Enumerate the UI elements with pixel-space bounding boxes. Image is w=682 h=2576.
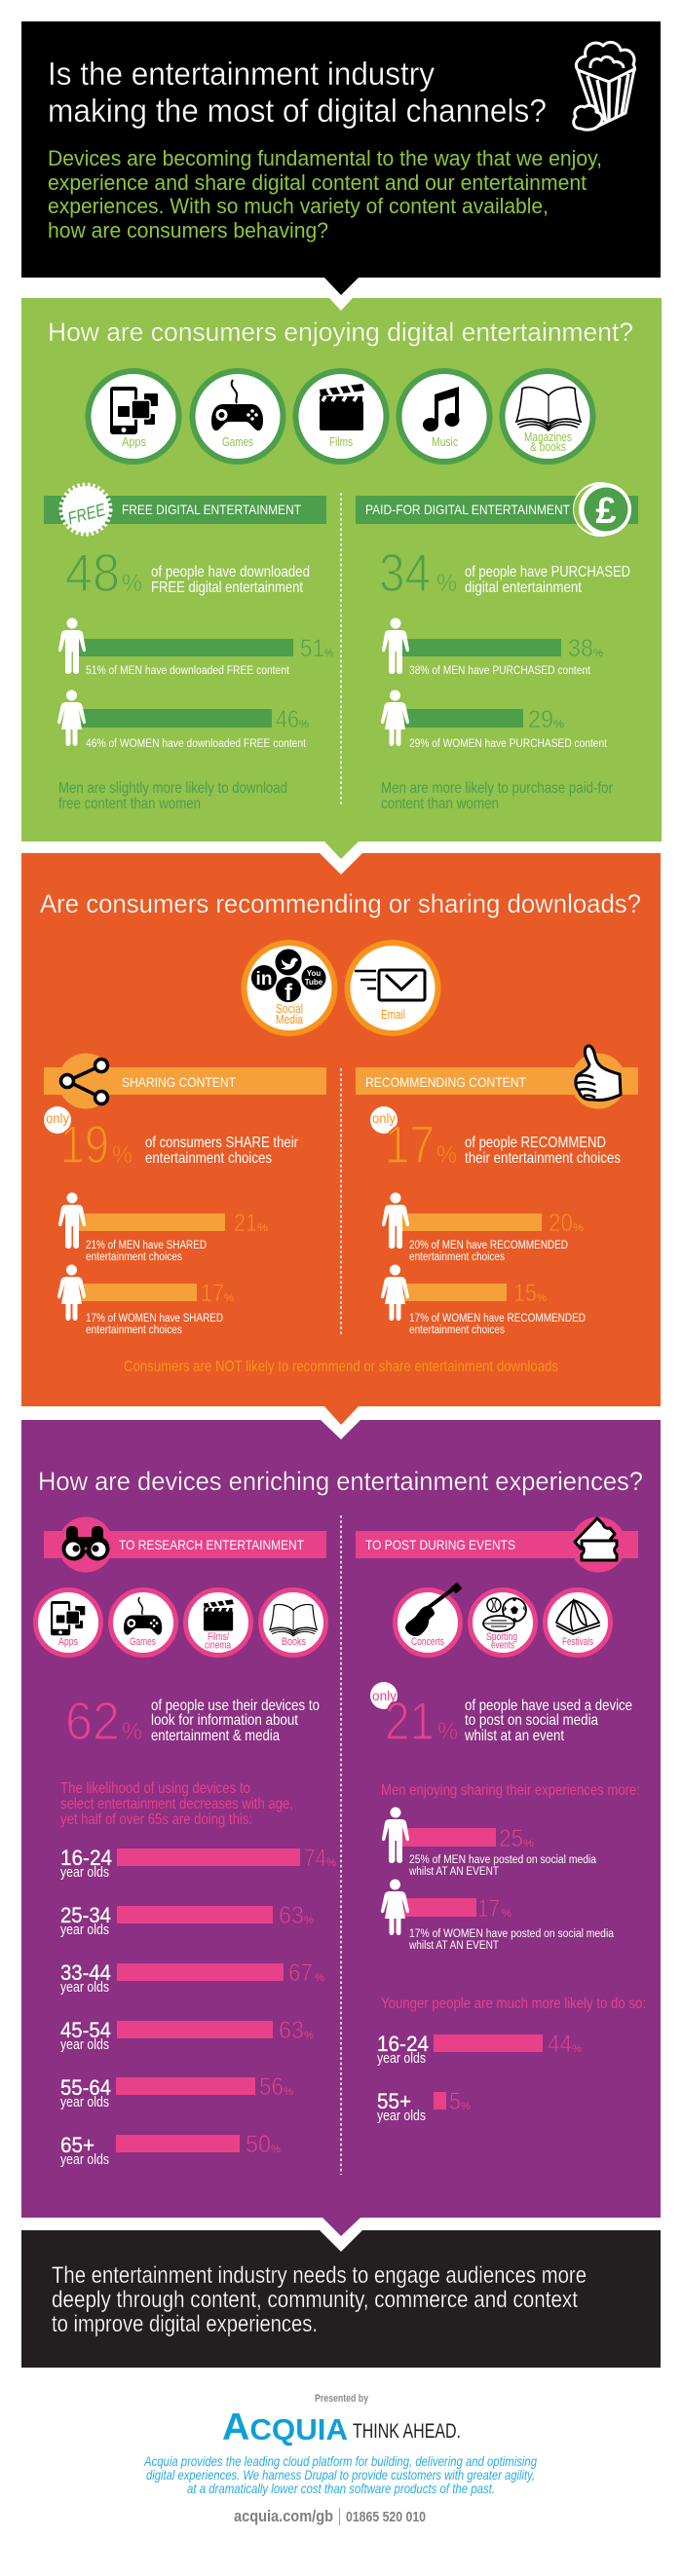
stat: only 19 percent share: 19: [60, 1114, 109, 1175]
bar: men recommended 20: [382, 1192, 584, 1263]
icon: small films: Films/: [208, 1631, 230, 1643]
logo: Acquia: ACQUIA: [222, 2407, 348, 2448]
icon: pound coin: £: [595, 491, 617, 532]
heading: green panel: How are consumers enjoying digital entertainment?: [48, 317, 633, 347]
icon: sporting events balls: [470, 1589, 536, 1656]
bar: men posted 25: 25: [499, 1825, 523, 1852]
bar: 16-24: [60, 1845, 336, 1881]
icon: games: [193, 371, 283, 462]
bar: women posted 17: [381, 1880, 615, 1952]
panel: green, consumers enjoying digital entertainment: [21, 278, 662, 841]
bar: posting 55+: [377, 2088, 471, 2124]
icon: social media: Social: [276, 1001, 303, 1016]
company description: digital experiences. We harness Drupal to provide customers with greater agility,: [146, 2467, 535, 2483]
banner: sharing content: SHARING CONTENT: [122, 1074, 236, 1090]
bar: 25-34: year olds: [60, 1922, 109, 1938]
bar: women paid 29: %: [553, 719, 564, 730]
stat: only 19 percent share: [44, 1106, 299, 1175]
text: presented by: Presented by: [315, 2393, 369, 2405]
title: [48, 56, 547, 129]
intro paragraph: experience and share digital content and our entertainment: [48, 170, 587, 195]
bar: 65+: %: [271, 2144, 281, 2155]
bar: 16-24: year olds: [60, 1864, 109, 1881]
banner: to post during events: [356, 1517, 638, 1572]
icon: social media: Tube: [305, 978, 323, 987]
arrow: green pointer: [324, 841, 359, 859]
stat: only 21 percent post: [370, 1682, 632, 1751]
bar: women recommended 15: 15: [513, 1280, 537, 1307]
stat: only 21 percent post: to post on social media: [465, 1712, 598, 1729]
panel: header: [21, 21, 661, 278]
company description: [143, 2453, 537, 2496]
bar: 33-44: %: [315, 1972, 324, 1984]
bar: posting 16-24: [377, 2031, 582, 2067]
bar: 33-44: 67: [288, 1960, 313, 1987]
stat: 34 percent purchased: digital entertainment: [465, 579, 582, 596]
conclusion: paid content: content than women: [381, 796, 499, 812]
bar: men paid 38: [382, 617, 603, 677]
banner: to research entertainment: TO RESEARCH ENTERTAINMENT: [119, 1537, 304, 1552]
stat: only 17 percent recommend: %: [436, 1141, 457, 1169]
stat: 48 percent free: [65, 542, 310, 603]
bar: women free 46: [57, 690, 309, 750]
icon: sporting events balls: events: [491, 1640, 514, 1652]
bar: 33-44: year olds: [60, 1979, 109, 1996]
bar: men free 51: 51: [300, 635, 324, 662]
conclusion: free content: [58, 780, 287, 812]
conclusion: free content: free content than women: [58, 796, 201, 812]
banner: paid-for digital entertainment: [356, 496, 638, 524]
bar: women free 46: 46% of WOMEN have downloaded FREE content: [86, 738, 307, 750]
stat: 48 percent free: FREE digital entertainment: [151, 579, 303, 596]
banner: paid-for digital entertainment: PAID-FOR DIGITAL ENTERTAINMENT: [365, 502, 570, 517]
icon: email: Email: [381, 1007, 405, 1022]
stat: only 19 percent share: %: [112, 1141, 133, 1169]
bar: men free 51: [58, 617, 333, 677]
icon: films: [296, 371, 386, 462]
icon: concerts guitar: [396, 1584, 461, 1656]
stat: 34 percent purchased: %: [436, 570, 457, 597]
icon: magazines and books: Magazines: [524, 429, 572, 444]
title: making the most of digital channels?: [48, 93, 547, 129]
stat: only 17 percent recommend: their entertainment choices: [465, 1150, 621, 1167]
bar: men recommended 20: 20% of MEN have RECOMMENDED: [409, 1240, 568, 1251]
closing text: to improve digital experiences.: [52, 2311, 318, 2337]
bar: men posted 25: whilst AT AN EVENT: [408, 1866, 499, 1878]
stat: 62 percent research: [65, 1691, 320, 1751]
icon: small apps: Apps: [58, 1636, 78, 1648]
bar: women shared 17: 17% of WOMEN have SHARED: [86, 1313, 223, 1325]
icon: share nodes: [60, 1060, 107, 1104]
chart: age bars left: [60, 1845, 336, 2168]
icon: magazines and books: [503, 371, 592, 462]
bar: 16-24: 16-24: [60, 1846, 112, 1870]
banner: recommending content: RECOMMENDING CONTENT: [365, 1074, 526, 1090]
icon: small apps: [35, 1589, 101, 1656]
icon: social media: f: [284, 980, 293, 1006]
bar: 25-34: %: [304, 1915, 314, 1926]
icon: free badge: [60, 485, 111, 534]
bar: men posted 25: %: [523, 1838, 534, 1849]
icon: social media: in: [256, 969, 272, 989]
stat: 34 percent purchased: [379, 542, 630, 603]
stat: 62 percent research: entertainment & media: [151, 1728, 280, 1744]
stat: only 17 percent recommend: 17: [385, 1114, 435, 1175]
bar: 65+: year olds: [60, 2151, 109, 2168]
stat: 34 percent purchased: of people have PURCHASED: [465, 564, 630, 580]
panel: orange, recommending or sharing: [21, 841, 661, 1406]
bar: women free 46: %: [299, 719, 309, 730]
closing text: deeply through content, community, commerce and context: [52, 2287, 578, 2313]
stat: only 21 percent post: only: [372, 1688, 397, 1703]
icon: magazines and books: & books: [530, 439, 566, 454]
arrow: header pointer: [324, 278, 359, 295]
bar: posting 55+: 55+: [377, 2089, 411, 2113]
tagline: THINK AHEAD.: [353, 2420, 461, 2443]
banner: sharing content: [44, 1054, 326, 1108]
contact details: 01865 520 010: [346, 2509, 426, 2525]
bar: 25-34: [60, 1902, 314, 1938]
arrow: purple pointer: [322, 2218, 360, 2236]
icon: small books: Books: [282, 1636, 306, 1648]
bar: posting 55+: year olds: [377, 2108, 426, 2124]
text: likelihood by age: select entertainment decreases with age,: [60, 1796, 293, 1812]
bar: women recommended 15: 17% of WOMEN have RECOMMENDED: [409, 1313, 586, 1325]
bar: 45-54: [60, 2017, 314, 2053]
icon: games: Games: [222, 434, 253, 449]
stat: only 19 percent share: entertainment choices: [145, 1150, 272, 1167]
bar: men paid 38: %: [593, 648, 603, 659]
banner: recommending content: [356, 1054, 638, 1108]
bar: men paid 38: 38% of MEN have PURCHASED content: [409, 665, 591, 677]
icon: small games: [111, 1589, 175, 1656]
icon: sporting events balls: Sporting: [486, 1631, 517, 1643]
conclusion: paid content: Men are more likely to purchase paid-for: [381, 780, 614, 797]
bar: 55-64: %: [284, 2086, 293, 2098]
stat: only 21 percent post: 21: [385, 1691, 435, 1751]
icon: social media: You: [307, 969, 321, 978]
bar: women posted 17: %: [502, 1908, 512, 1920]
bar: men posted 25: [382, 1808, 597, 1878]
bar: 33-44: [60, 1960, 324, 1996]
stat: only 19 percent share: of consumers SHARE their: [145, 1135, 299, 1151]
icon: music: Music: [432, 434, 458, 449]
stat: only 17 percent recommend: only: [372, 1110, 396, 1126]
stat: 48 percent free: %: [122, 570, 142, 597]
icon: pound coin: [573, 482, 631, 537]
stat: 62 percent research: look for information about: [151, 1712, 298, 1729]
bar: 65+: 65+: [60, 2133, 95, 2157]
heading: orange panel: Are consumers recommending or sharing downloads?: [40, 889, 641, 918]
bar: men shared 21: entertainment choices: [86, 1251, 182, 1263]
bar: 16-24: 74: [304, 1845, 326, 1872]
bar: posting 55+: 5: [449, 2088, 461, 2115]
icon: tickets: [575, 1518, 617, 1560]
intro paragraph: Devices are becoming fundamental to the way that we enjoy,: [48, 146, 602, 170]
text: likelihood by age: The likelihood of using devices to: [60, 1780, 250, 1797]
contact details: acquia.com/gb: [234, 2507, 333, 2525]
icon: free badge: FREE: [65, 500, 108, 529]
stat: 62 percent research: %: [122, 1718, 142, 1745]
bar: women shared 17: 17: [201, 1280, 224, 1307]
bar: men free 51: %: [324, 648, 333, 659]
bar: women free 46: 46: [276, 706, 299, 733]
bar: 16-24: %: [326, 1857, 336, 1869]
title: Is the entertainment industry: [48, 56, 435, 92]
bar: men free 51: 51% of MEN have downloaded FREE content: [86, 665, 290, 677]
bar: 45-54: %: [304, 2030, 314, 2041]
intro paragraph: experiences. With so much variety of content available,: [48, 194, 549, 218]
icon: binoculars: [62, 1526, 109, 1560]
bar: 55-64: 55-64: [60, 2075, 111, 2100]
icon: popcorn: [574, 42, 635, 130]
bar: women shared 17: %: [224, 1292, 234, 1304]
icon: email: [347, 943, 438, 1033]
stat: only 19 percent share: only: [46, 1110, 69, 1126]
text: likelihood by age: yet half of over 65s are doing this:: [60, 1811, 252, 1828]
bar: posting 16-24: 44: [548, 2031, 572, 2058]
bar: women recommended 15: [381, 1264, 586, 1336]
icon: films: Films: [329, 434, 353, 449]
bar: men shared 21: 21: [234, 1210, 257, 1237]
banner: free digital entertainment: FREE DIGITAL ENTERTAINMENT: [122, 502, 301, 517]
icon: social media: Media: [276, 1012, 304, 1027]
icon: music: [399, 371, 489, 462]
bar: women shared 17: entertainment choices: [86, 1325, 182, 1336]
bar: 45-54: 63: [279, 2017, 304, 2044]
stat: only 21 percent post: %: [437, 1718, 458, 1745]
bar: 25-34: 25-34: [60, 1903, 111, 1927]
bar: men shared 21: 21% of MEN have SHARED: [86, 1240, 207, 1251]
bar: women paid 29: 29: [528, 706, 553, 733]
heading: purple panel: How are devices enriching entertainment experiences?: [38, 1467, 643, 1496]
footer: [143, 2393, 537, 2525]
closing text: The entertainment industry needs to engage audiences more: [52, 2262, 587, 2289]
company description: Acquia provides the leading cloud platform for building, delivering and optimising: [143, 2453, 537, 2469]
bar: women paid 29: 29% of WOMEN have PURCHASED content: [409, 738, 608, 750]
banner: to research entertainment: [44, 1517, 326, 1572]
conclusion: free content: Men are slightly more likely to download: [58, 780, 287, 797]
contact details: [234, 2507, 426, 2525]
intro paragraph: how are consumers behaving?: [48, 218, 328, 243]
icon: concerts guitar: Concerts: [411, 1636, 444, 1648]
conclusion: orange panel: Consumers are NOT likely to recommend or share entertainment downloads: [124, 1359, 558, 1375]
stat: only 17 percent recommend: [370, 1106, 621, 1175]
bar: women recommended 15: entertainment choices: [409, 1325, 505, 1336]
stat: 62 percent research: of people use their devices to: [151, 1698, 320, 1714]
icon: social media: [244, 943, 335, 1033]
company description: at a dramatically lower cost than software products of the past.: [187, 2481, 495, 2496]
stat: 62 percent research: 62: [65, 1691, 120, 1751]
bar: 45-54: year olds: [60, 2036, 109, 2053]
closing text: [52, 2262, 587, 2337]
bar: men recommended 20: entertainment choices: [409, 1251, 505, 1263]
bar: 25-34: 63: [279, 1902, 304, 1929]
bar: women posted 17: 17: [477, 1895, 500, 1923]
bar: women posted 17: 17% of WOMEN have posted on social media: [409, 1928, 615, 1940]
icon: apps: [88, 371, 179, 462]
icon: small films: [185, 1589, 251, 1656]
bar: men paid 38: 38: [568, 635, 593, 662]
bar: men recommended 20: 20: [549, 1210, 573, 1237]
arrow: orange pointer: [324, 1406, 359, 1425]
stat: only 17 percent recommend: of people RECOMMEND: [465, 1135, 606, 1151]
stat: 48 percent free: 48: [65, 542, 120, 603]
bar: women posted 17: whilst AT AN EVENT: [408, 1940, 499, 1952]
bar: posting 16-24: %: [572, 2043, 582, 2055]
stat: 48 percent free: of people have downloaded: [151, 564, 310, 580]
icon: small films: cinema: [205, 1640, 232, 1652]
intro paragraph: [48, 146, 602, 243]
bar: posting 16-24: year olds: [377, 2050, 426, 2067]
bar: posting 16-24: 16-24: [377, 2032, 429, 2056]
icon: thumbs up: [576, 1046, 621, 1101]
stat: 34 percent purchased: 34: [379, 542, 431, 603]
banner: to post during events: TO POST DURING EVENTS: [365, 1537, 515, 1552]
icon: festivals tent: Festivals: [562, 1636, 593, 1648]
icon: small games: Games: [130, 1636, 156, 1648]
banner: free digital entertainment: [44, 496, 326, 524]
text: likelihood by age: [60, 1780, 293, 1828]
bar: women shared 17: [57, 1264, 234, 1336]
bar: 65+: 50: [246, 2131, 271, 2158]
bar: men posted 25: 25% of MEN have posted on social media: [409, 1854, 597, 1866]
bar: men shared 21: %: [257, 1222, 268, 1234]
bar: 33-44: 33-44: [60, 1960, 111, 1985]
bar: 45-54: 45-54: [60, 2018, 111, 2042]
stat: only 21 percent post: of people have used a device: [465, 1698, 632, 1714]
conclusion: paid content: [381, 780, 614, 812]
bar: women paid 29: [381, 690, 608, 750]
bar: 55-64: year olds: [60, 2094, 109, 2110]
icon: apps: Apps: [122, 434, 146, 449]
stat: only 21 percent post: whilst at an event: [464, 1728, 564, 1744]
bar: posting 55+: %: [461, 2101, 471, 2112]
panel: closing statement: [21, 2218, 661, 2368]
bar: 65+: [60, 2131, 281, 2168]
icon: festivals tent: [546, 1589, 610, 1656]
bar: 55-64: 56: [259, 2073, 284, 2101]
icon: small books: [261, 1589, 325, 1656]
panel: purple, devices enriching experiences: [21, 1406, 661, 2218]
bar: men recommended 20: %: [573, 1222, 584, 1234]
bar: men shared 21: [58, 1192, 268, 1263]
bar: 55-64: [60, 2073, 293, 2110]
bar: women recommended 15: %: [537, 1292, 547, 1304]
